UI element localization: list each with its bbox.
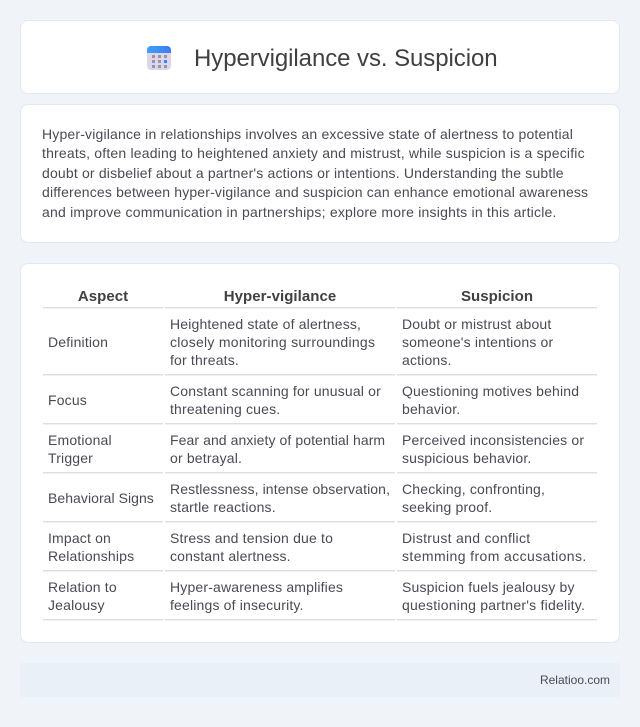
row: Focus: Constant scanning for unusual or bbox=[170, 383, 381, 399]
intro text: Hyper-vigilance in relationships involves an excessive state of alertness to potential bbox=[42, 126, 573, 142]
intro panel bbox=[20, 104, 620, 243]
row: Relation to Jealousy: feelings of insecurity. bbox=[170, 597, 304, 613]
intro text bbox=[42, 126, 588, 220]
row: Emotional Trigger: Trigger bbox=[48, 450, 93, 466]
row: Behavioral Signs: Behavioral Signs bbox=[48, 490, 154, 506]
row: Definition: Heightened state of alertness, bbox=[170, 316, 361, 332]
row: Relation to Jealousy: Relation to bbox=[48, 579, 117, 595]
column heading: Suspicion: Suspicion bbox=[461, 288, 533, 305]
row: Emotional Trigger: Emotional bbox=[48, 432, 112, 448]
icon: calendar bbox=[147, 46, 171, 70]
row: Relation to Jealousy: questioning partner's fidelity. bbox=[402, 597, 585, 613]
column heading: Hyper-vigilance: Hyper-vigilance bbox=[224, 288, 336, 305]
row: Emotional Trigger: suspicious behavior. bbox=[402, 450, 531, 466]
row: Focus: Focus bbox=[48, 392, 87, 408]
row: Impact on Relationships: stemming from accusations. bbox=[402, 548, 587, 564]
footer credit: Relatioo.com bbox=[540, 673, 610, 687]
row: Definition: Definition bbox=[48, 334, 108, 350]
row: Focus: behavior. bbox=[402, 401, 460, 417]
row: Impact on Relationships: Stress and tension due to bbox=[170, 530, 333, 546]
row: Behavioral Signs: startle reactions. bbox=[170, 499, 276, 515]
footer bar bbox=[20, 663, 620, 697]
intro text: doubt or disbelief about a partner's actions or intentions. Understanding the subtle bbox=[42, 165, 564, 181]
row: Impact on Relationships: constant alertness. bbox=[170, 548, 291, 564]
intro text: threats, often leading to heightened anxiety and mistrust, while suspicion is a specific bbox=[42, 145, 585, 161]
row: Relation to Jealousy: Hyper-awareness amplifies bbox=[170, 579, 343, 595]
column heading: Aspect: Aspect bbox=[78, 288, 128, 305]
row: Definition: Doubt or mistrust about bbox=[402, 316, 551, 332]
row: Impact on Relationships: Impact on bbox=[48, 530, 111, 546]
row: Relation to Jealousy: Jealousy bbox=[48, 597, 105, 613]
row: Behavioral Signs: seeking proof. bbox=[402, 499, 492, 515]
row: Impact on Relationships: Distrust and conflict bbox=[402, 530, 530, 546]
title: Hypervigilance vs. Suspicion bbox=[194, 45, 498, 72]
row: Emotional Trigger: Perceived inconsistencies or bbox=[402, 432, 584, 448]
row: Relation to Jealousy: Suspicion fuels jealousy by bbox=[402, 579, 575, 595]
row: Focus: Questioning motives behind bbox=[402, 383, 579, 399]
row: Definition: actions. bbox=[402, 352, 452, 368]
row: Focus: threatening cues. bbox=[170, 401, 280, 417]
row: Behavioral Signs: Checking, confronting, bbox=[402, 481, 545, 497]
row: Definition: closely monitoring surroundings bbox=[170, 334, 375, 350]
row: Behavioral Signs: Restlessness, intense observation, bbox=[170, 481, 390, 497]
header panel bbox=[20, 20, 620, 94]
table panel bbox=[20, 263, 620, 643]
row: Definition: for threats. bbox=[170, 352, 239, 368]
row: Emotional Trigger: Fear and anxiety of potential harm bbox=[170, 432, 385, 448]
row: Emotional Trigger: or betrayal. bbox=[170, 450, 242, 466]
row: Definition: someone's intentions or bbox=[402, 334, 553, 350]
row: Impact on Relationships: Relationships bbox=[48, 548, 134, 564]
intro text: and improve communication in partnerships; explore more insights in this article. bbox=[42, 204, 557, 220]
intro text: differences between hyper-vigilance and suspicion can enhance emotional awareness bbox=[42, 184, 588, 200]
